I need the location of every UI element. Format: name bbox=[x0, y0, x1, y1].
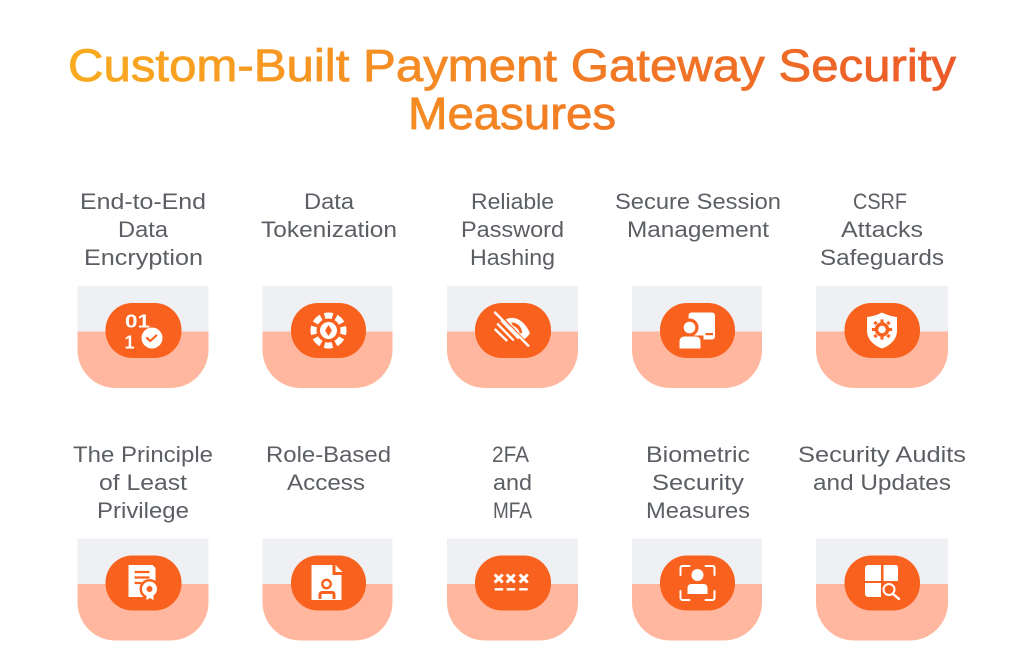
icon: binary with check bbox=[124, 312, 162, 352]
label: Data Tokenization bbox=[261, 189, 397, 242]
label: Biometric Security Measures: Measures bbox=[646, 498, 750, 523]
label: Biometric Security Measures: Security bbox=[652, 470, 744, 495]
label: Security Audits and Updates: and Updates bbox=[813, 470, 951, 495]
label: Data Tokenization: Tokenization bbox=[261, 217, 397, 242]
panel: Data Tokenization bbox=[261, 189, 397, 388]
title bbox=[68, 40, 957, 139]
icon: user document bbox=[312, 565, 342, 600]
label: Biometric Security Measures: Biometric bbox=[646, 442, 750, 467]
icon: grid with magnifier bbox=[865, 565, 899, 599]
label: Reliable Password Hashing: Password bbox=[461, 217, 564, 242]
icon: binary with check: 1 bbox=[124, 332, 135, 352]
label: CSRF Attacks Safeguards: Safeguards bbox=[820, 245, 944, 270]
label: Secure Session Management: Secure Session bbox=[615, 189, 781, 214]
label: The Principle of Least Privilege: of Least bbox=[99, 470, 187, 495]
label: Secure Session Management bbox=[615, 189, 781, 242]
label: Role-Based Access bbox=[266, 442, 391, 495]
label: Reliable Password Hashing bbox=[461, 189, 564, 270]
panel: Security Audits and Updates bbox=[798, 442, 966, 640]
card background bbox=[262, 538, 392, 640]
label: End-to-End Data Encryption: Encryption bbox=[84, 245, 203, 270]
icon: token chip bbox=[314, 316, 344, 346]
icon: masked code bbox=[495, 574, 528, 589]
label: The Principle of Least Privilege: Privilege bbox=[97, 498, 189, 523]
icon: face scan bbox=[680, 566, 714, 600]
label: CSRF Attacks Safeguards bbox=[820, 189, 944, 270]
label: End-to-End Data Encryption: Data bbox=[118, 217, 169, 242]
label: CSRF Attacks Safeguards: CSRF bbox=[853, 189, 907, 214]
panel: 2FA and MFA bbox=[447, 442, 578, 640]
label: Reliable Password Hashing: Reliable bbox=[471, 189, 554, 214]
icon: crossed-out eye bbox=[495, 312, 530, 346]
card background bbox=[447, 538, 578, 640]
icon: shield with gear bbox=[867, 312, 897, 348]
title: Custom-Built Payment Gateway Security bbox=[68, 40, 957, 91]
panel: The Principle of Least Privilege bbox=[73, 442, 213, 640]
label: 2FA and MFA: and bbox=[493, 470, 532, 495]
icon: session user with card bbox=[678, 312, 715, 350]
label: 2FA and MFA bbox=[492, 442, 532, 523]
panel: End-to-End Data Encryption bbox=[78, 189, 208, 388]
label: Role-Based Access: Role-Based bbox=[266, 442, 391, 467]
panel: Role-Based Access bbox=[262, 442, 392, 640]
label: End-to-End Data Encryption bbox=[80, 189, 206, 270]
title: Measures bbox=[408, 88, 616, 139]
label: Role-Based Access: Access bbox=[287, 470, 365, 495]
label: Secure Session Management: Management bbox=[627, 217, 769, 242]
card background bbox=[78, 286, 208, 388]
label: End-to-End Data Encryption: End-to-End bbox=[80, 189, 206, 214]
label: 2FA and MFA: MFA bbox=[493, 498, 532, 523]
panel: Secure Session Management bbox=[615, 189, 781, 388]
panel: Reliable Password Hashing bbox=[447, 189, 578, 388]
label: Security Audits and Updates: Security Audits bbox=[798, 442, 966, 467]
card background bbox=[632, 286, 762, 388]
card background bbox=[816, 538, 948, 640]
card background bbox=[632, 538, 762, 640]
label: 2FA and MFA: 2FA bbox=[492, 442, 529, 467]
card background bbox=[447, 286, 578, 388]
label: Security Audits and Updates bbox=[798, 442, 966, 495]
label: The Principle of Least Privilege bbox=[73, 442, 213, 523]
icon: binary with check: 01 bbox=[125, 312, 150, 332]
card background bbox=[262, 286, 392, 388]
icon: certificate document bbox=[128, 565, 160, 600]
label: Biometric Security Measures bbox=[646, 442, 750, 523]
label: Reliable Password Hashing: Hashing bbox=[470, 245, 555, 270]
card background bbox=[78, 538, 208, 640]
label: Data Tokenization: Data bbox=[304, 189, 355, 214]
label: CSRF Attacks Safeguards: Attacks bbox=[841, 217, 923, 242]
label: The Principle of Least Privilege: The Principle bbox=[73, 442, 213, 467]
panel: CSRF Attacks Safeguards bbox=[816, 189, 948, 388]
panel: Biometric Security Measures bbox=[632, 442, 762, 640]
card background bbox=[816, 286, 948, 388]
